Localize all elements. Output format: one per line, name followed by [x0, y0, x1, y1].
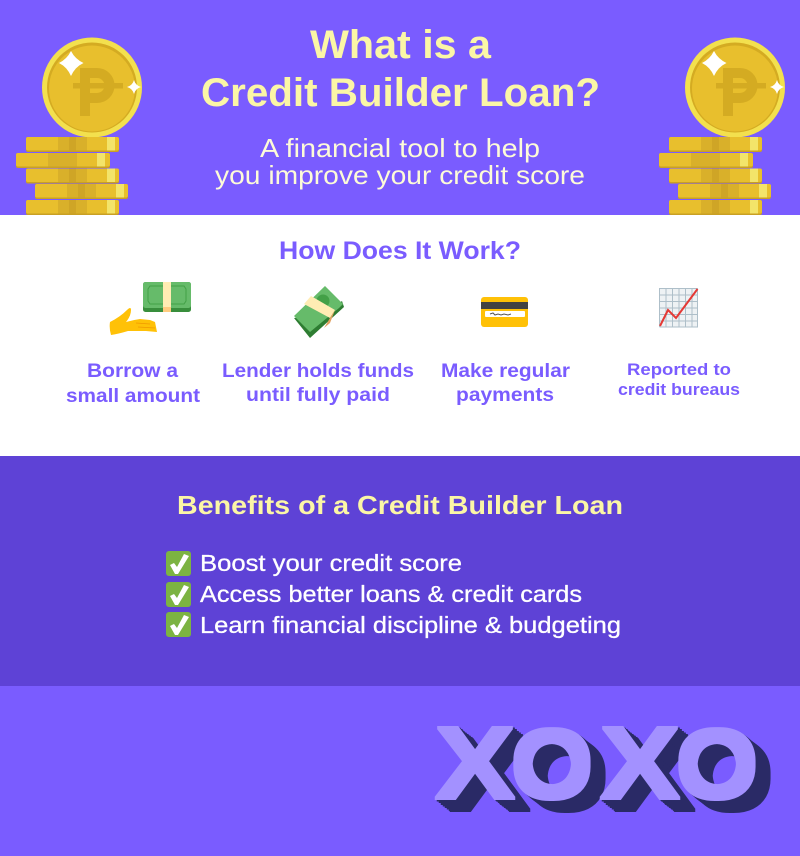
step 2 label: Lender holds funds — [222, 360, 414, 382]
icon: chart increasing — [659, 288, 698, 327]
step 3 label: payments — [456, 384, 554, 406]
step 3 label: Make regular — [441, 360, 570, 382]
subtitle: A financial tool to help — [260, 133, 540, 163]
icon: credit card — [481, 297, 528, 327]
step 2 label — [222, 360, 414, 406]
subtitle — [215, 133, 585, 190]
XOXO lettering: O — [511, 711, 593, 818]
benefit 1: Boost your credit score — [200, 550, 462, 576]
icon: left coin stack — [16, 38, 142, 215]
heading: how does it work: How Does It Work? — [279, 237, 521, 265]
icon: hand with cash — [110, 282, 191, 335]
step 1 label: small amount — [66, 385, 201, 407]
XOXO lettering: X — [435, 706, 515, 820]
step 4 label: credit bureaus — [618, 381, 740, 399]
panel: how it works — [0, 215, 800, 456]
step 4 label: Reported to — [627, 361, 731, 379]
step 3 label — [441, 360, 570, 406]
panel: benefits — [0, 456, 800, 686]
step 1 label: Borrow a — [87, 360, 178, 382]
title — [201, 23, 600, 115]
step 1 label — [66, 360, 201, 407]
XOXO lettering — [435, 706, 758, 820]
title: Credit Builder Loan? — [201, 71, 600, 115]
benefit 2: Access better loans & credit cards — [200, 581, 582, 607]
icon: cash bundle — [294, 286, 344, 338]
step 4 label — [618, 361, 740, 399]
icon: right coin stack — [659, 38, 785, 215]
title: What is a — [310, 23, 492, 67]
step 2 label: until fully paid — [246, 384, 390, 406]
benefit 3: Learn financial discipline & budgeting — [200, 612, 621, 638]
subtitle: you improve your credit score — [215, 160, 585, 190]
XOXO lettering: O — [676, 711, 758, 818]
heading: benefits: Benefits of a Credit Builder Loan — [177, 490, 623, 520]
XOXO lettering: X — [600, 706, 680, 820]
